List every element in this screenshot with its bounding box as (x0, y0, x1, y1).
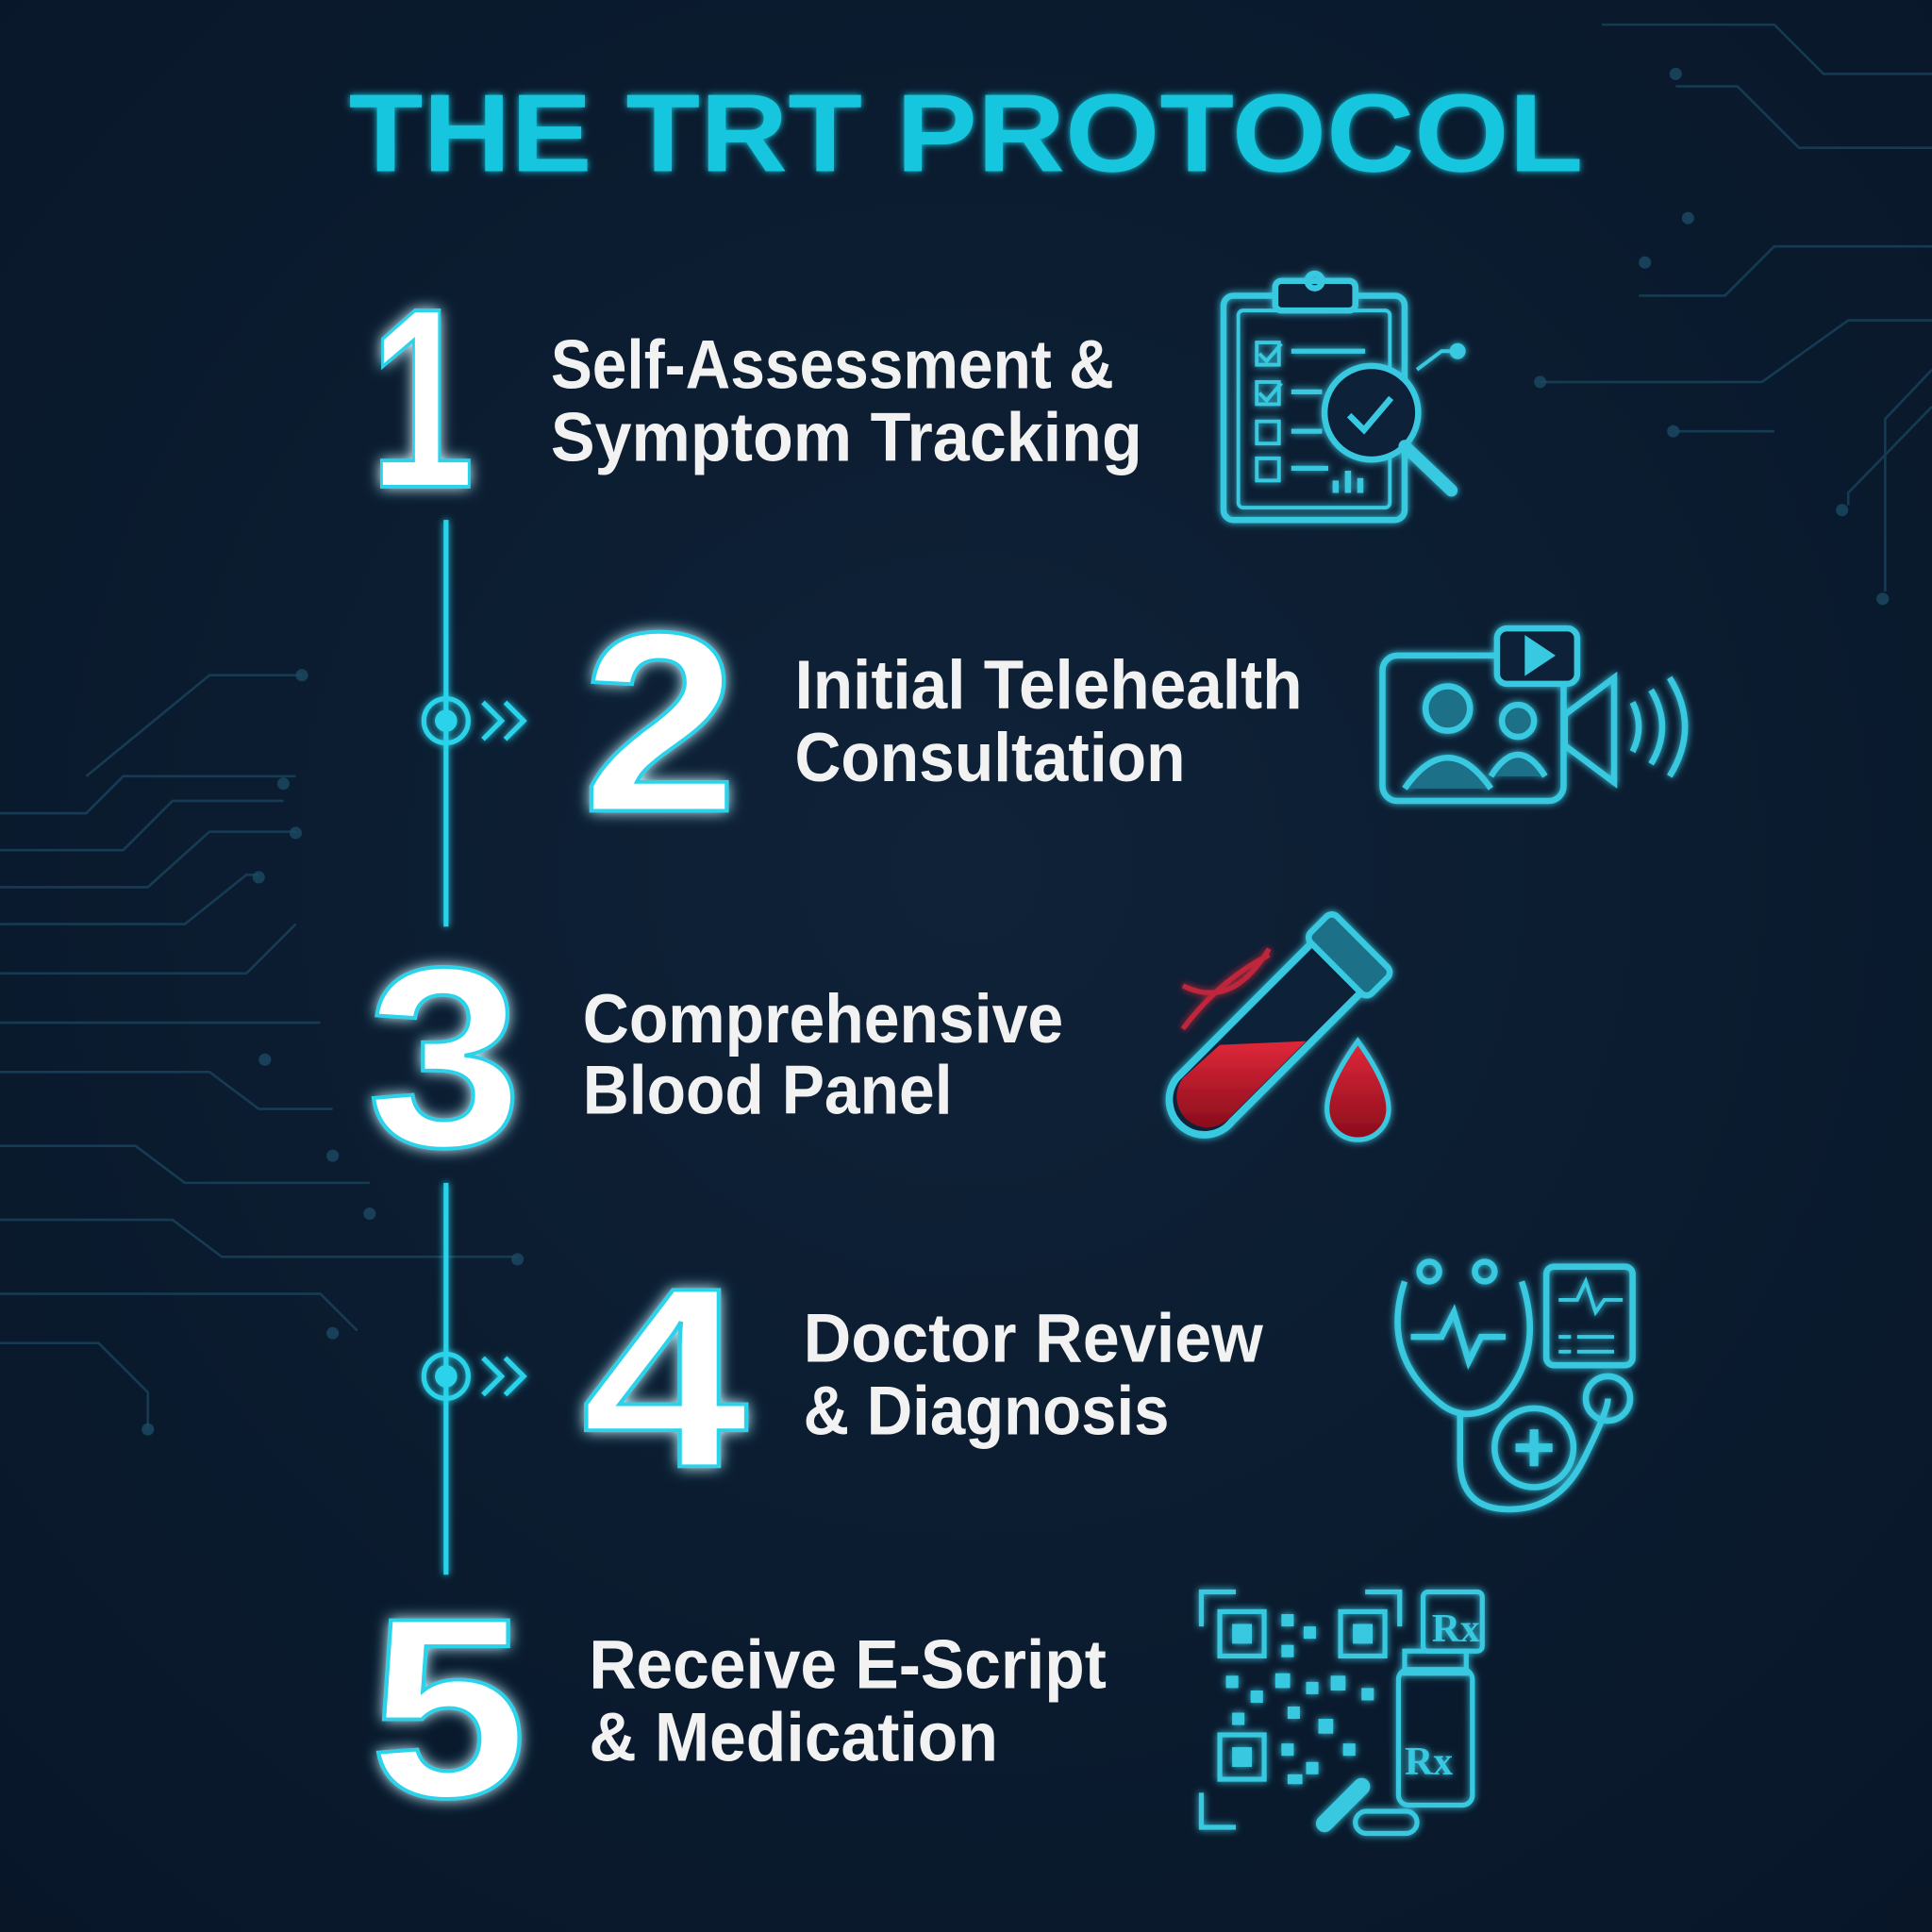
step 2: Consultation (794, 720, 1185, 796)
step 1: Self-Assessment & (551, 326, 1114, 403)
step 3: Comprehensive (583, 981, 1063, 1058)
icon: clipboard with magnifier (1224, 274, 1462, 520)
step 5: & Medication (589, 1699, 998, 1775)
step 2 (581, 578, 1303, 865)
timeline connector (424, 520, 524, 1574)
step 1: Symptom Tracking (551, 399, 1142, 475)
step 2: 2 (581, 578, 738, 865)
step 5: 5 (370, 1564, 527, 1851)
title: THE TRT PROTOCOL (349, 72, 1583, 195)
step 4: 4 (581, 1234, 750, 1521)
step 3: 3 (367, 914, 523, 1201)
step 4: Doctor Review (804, 1300, 1264, 1376)
step 1 (370, 255, 1142, 541)
icon: video consultation (1382, 628, 1685, 801)
step 5: Receive E-Script (589, 1626, 1107, 1703)
step 1: 1 (370, 255, 475, 541)
icon: QR code and Rx bottle: Rx (1405, 1740, 1453, 1784)
step 4: & Diagnosis (804, 1373, 1170, 1449)
icon: blood test tube (1170, 911, 1392, 1140)
icon: stethoscope and monitor (1398, 1261, 1633, 1509)
step 2: Initial Telehealth (794, 647, 1303, 724)
icon: QR code and Rx bottle (1201, 1592, 1482, 1834)
step 3: Blood Panel (583, 1053, 953, 1129)
step 5 (370, 1564, 1107, 1851)
step 3 (367, 914, 1063, 1201)
step 4 (581, 1234, 1264, 1521)
icon: QR code and Rx bottle: Rx (1432, 1607, 1480, 1651)
